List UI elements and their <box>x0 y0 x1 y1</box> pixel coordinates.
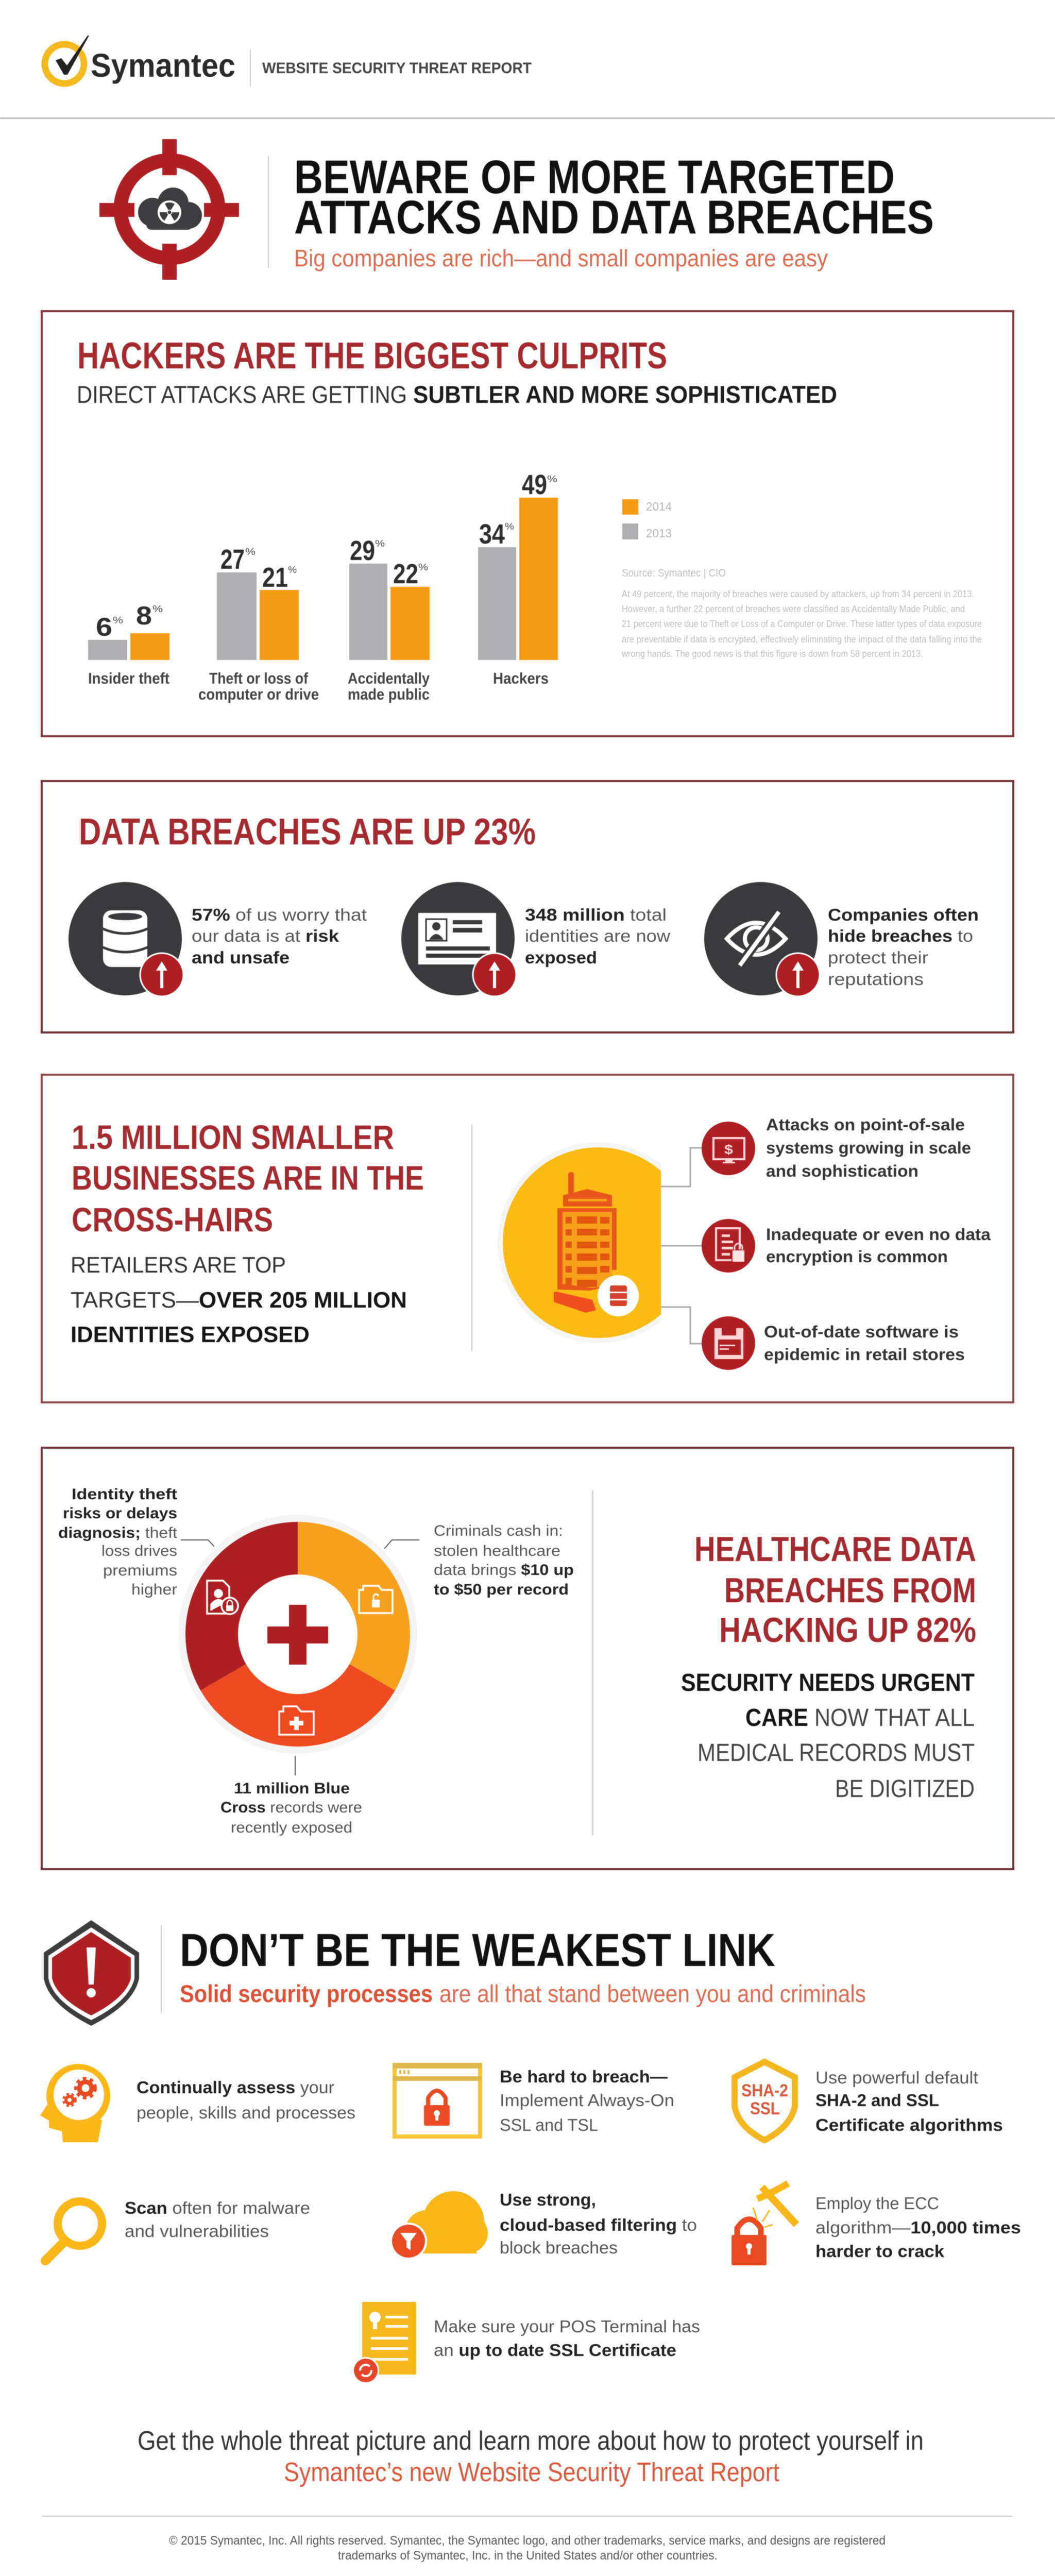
stat text: and unsafe <box>192 948 290 967</box>
stat text: protect their <box>828 948 928 967</box>
tip text: an up to date SSL Certificate <box>434 2341 676 2360</box>
tip text: Certificate algorithms <box>815 2115 1003 2134</box>
bars: accidentally made public: 29 <box>350 535 375 566</box>
donut chart <box>178 1515 417 1754</box>
bars: insider theft <box>88 601 169 687</box>
risk: encryption <box>702 1219 991 1273</box>
callout: Blue Cross records: Cross records were <box>220 1799 362 1816</box>
tip text: and vulnerabilities <box>125 2222 269 2241</box>
logo wordmark: Symantec <box>91 47 235 84</box>
bars: hackers: 49 <box>522 469 547 500</box>
header: Symantec logo and report name <box>45 36 532 87</box>
icon: Symantec check ring <box>45 36 89 83</box>
tip text: Be hard to breach— <box>500 2067 668 2086</box>
subheading: SECURITY NEEDS URGENT <box>681 1669 975 1697</box>
bars: hackers <box>478 469 558 687</box>
subheading: CARE NOW THAT ALL <box>745 1704 975 1732</box>
tip: hard to breach <box>393 2063 674 2137</box>
callout: identity theft: loss drives <box>101 1543 177 1560</box>
callout: criminals cash in: stolen healthcare <box>434 1543 560 1560</box>
tip text: cloud-based filtering to <box>500 2215 697 2234</box>
stat: worry about data <box>69 882 367 996</box>
callout: Blue Cross records: 11 million Blue <box>234 1780 350 1797</box>
legend <box>622 499 672 540</box>
bars: hackers: % <box>505 521 514 532</box>
bars: hackers: 34 <box>479 519 505 550</box>
stat text: 57% of us worry that <box>192 905 367 924</box>
icon: magnifying glass <box>45 2201 102 2261</box>
callout: criminals cash in <box>384 1522 574 1598</box>
icon: crossed-out eye with up arrow <box>704 882 820 996</box>
bars: hackers: Hackers <box>493 669 549 687</box>
bars: insider theft: 8 <box>136 601 152 630</box>
subheading: TARGETS—OVER 205 MILLION <box>71 1287 407 1313</box>
section header: weakest link <box>44 1920 866 2026</box>
stat text: exposed <box>525 948 597 967</box>
title block <box>99 139 934 280</box>
tip text: SHA-2 and SSL <box>815 2091 939 2110</box>
heading <box>72 1118 424 1239</box>
icon: monitor with dollar sign <box>702 1122 755 1175</box>
callout: identity theft <box>58 1486 214 1598</box>
risk text: epidemic in retail stores <box>764 1345 965 1364</box>
main heading <box>294 151 934 244</box>
tip: ECC algorithm <box>731 2183 1021 2265</box>
subheading: are all that stand between you and criminals <box>439 1980 866 2007</box>
bars: insider theft: % <box>113 615 123 625</box>
tip: scan <box>45 2198 310 2261</box>
footer legal text <box>169 2534 886 2563</box>
stat text: 348 million total <box>525 905 667 924</box>
callout: criminals cash in: to $50 per record <box>434 1581 569 1598</box>
stat text: reputations <box>828 970 924 989</box>
legend: 2014 <box>646 500 672 513</box>
icon: medical cross <box>267 1605 328 1665</box>
icon: floppy disk <box>702 1316 755 1370</box>
subheading: SUBTLER AND MORE SOPHISTICATED <box>413 381 837 408</box>
tip: POS terminal certificate <box>352 2302 700 2384</box>
heading: 1.5 MILLION SMALLER <box>72 1118 394 1156</box>
tip text: Use strong, <box>500 2190 596 2209</box>
risk text <box>766 1225 991 1266</box>
subheading: BE DIGITIZED <box>835 1775 975 1803</box>
icon: patient file with lock <box>207 1581 238 1614</box>
explanatory text: At 49 percent, the majority of breaches were caused by attackers, up from 34 percent in 2013. <box>622 589 974 599</box>
icon: padlock and pickaxe <box>731 2183 796 2265</box>
callout: identity theft: diagnosis; theft <box>58 1524 178 1541</box>
tip text: Continually assess your <box>137 2078 334 2097</box>
bar chart <box>88 469 558 703</box>
footer legal text: trademarks of Symantec, Inc. in the United States and/or other countries. <box>338 2549 718 2563</box>
icon: SHA-2 SSL shield: SSL <box>750 2099 780 2119</box>
main heading: BEWARE OF MORE TARGETED <box>294 151 895 204</box>
heading: BREACHES FROM <box>724 1571 976 1610</box>
subheading <box>180 1980 866 2007</box>
icon: cloud with funnel <box>390 2191 488 2260</box>
icon: database badge <box>598 1275 639 1316</box>
subheading <box>77 381 837 408</box>
icon: head with gears <box>40 2064 110 2142</box>
bars: hackers: % <box>547 474 557 484</box>
explanatory text: wrong hands. The good news is that this figure is down from 58 percent in 2013. <box>621 649 923 659</box>
heading: HEALTHCARE DATA <box>694 1530 976 1569</box>
call to action: Get the whole threat picture and learn more about how to protect yourself in <box>138 2426 924 2456</box>
subheading: Solid security processes <box>180 1980 433 2007</box>
subheading: RETAILERS ARE TOP <box>71 1252 286 1278</box>
icon: building <box>554 1172 617 1313</box>
risk text: and sophistication <box>766 1162 918 1180</box>
source note: Source: Symantec | CIO <box>622 567 726 579</box>
footer legal text: © 2015 Symantec, Inc. All rights reserved. Symantec, the Symantec logo, and other trademarks, service marks, and designs are registered <box>169 2534 886 2548</box>
heading: DATA BREACHES ARE UP 23% <box>79 811 536 853</box>
connector lines <box>661 1148 703 1344</box>
panel: healthcare data breaches <box>42 1448 1013 1869</box>
bars: theft or loss: computer or drive <box>198 685 319 703</box>
tip text <box>500 2190 697 2257</box>
subheading: DIRECT ATTACKS ARE GETTING <box>77 381 407 408</box>
risk text: Out-of-date software is <box>764 1323 959 1341</box>
icon: SHA-2 SSL shield: SHA-2 <box>741 2081 788 2100</box>
risk: out-of-date software <box>702 1316 965 1370</box>
tip text: SSL and TSL <box>500 2115 598 2134</box>
bars: theft or loss: % <box>245 547 256 557</box>
risk text <box>766 1115 971 1180</box>
icon: crosshair target with cloud <box>99 139 239 280</box>
stat: identities exposed <box>401 882 670 996</box>
tip text <box>815 2194 1021 2261</box>
tip text: block breaches <box>500 2238 618 2257</box>
call to action <box>138 2426 924 2487</box>
callout: Blue Cross records: recently exposed <box>231 1819 352 1836</box>
stat text: Companies often <box>828 905 979 924</box>
call to action: Symantec’s new Website Security Threat Report <box>284 2458 779 2487</box>
bars: accidentally made public <box>348 535 430 703</box>
stat text <box>192 905 367 967</box>
risk text: systems growing in scale <box>766 1139 971 1157</box>
tip text <box>137 2078 355 2122</box>
subheading: MEDICAL RECORDS MUST <box>697 1739 975 1767</box>
explanatory text: are preventable if data is encrypted, effectively eliminating the impact of the data falling into the <box>622 634 982 645</box>
main heading: ATTACKS AND DATA BREACHES <box>294 191 934 244</box>
stat text: identities are now <box>525 926 670 945</box>
subheading <box>71 1252 407 1347</box>
icon: document with padlock <box>702 1219 755 1273</box>
risk: point of sale <box>702 1115 971 1180</box>
subtitle: Big companies are rich—and small companies are easy <box>294 245 828 272</box>
risk text: encryption is common <box>766 1247 948 1266</box>
bars: insider theft: Insider theft <box>88 669 169 687</box>
heading: HACKING UP 82% <box>719 1611 976 1650</box>
panel: data breaches are up <box>42 781 1013 1032</box>
callout: criminals cash in: data brings $10 up <box>434 1562 574 1579</box>
icon: database with up arrow <box>69 882 183 996</box>
report name: WEBSITE SECURITY THREAT REPORT <box>262 60 532 77</box>
bars: accidentally made public: 22 <box>393 558 418 589</box>
subheading <box>681 1669 975 1803</box>
icon: browser window with lock <box>393 2063 482 2137</box>
heading: BUSINESSES ARE IN THE <box>72 1159 424 1197</box>
tip text <box>125 2198 310 2241</box>
explanatory text: 21 percent were due to Theft or Loss of a Computer or Drive. These latter types of data exposure <box>622 619 982 629</box>
callout: Blue Cross records <box>220 1756 362 1836</box>
callout: criminals cash in: Criminals cash in: <box>434 1522 563 1539</box>
bars: accidentally made public: made public <box>348 685 430 703</box>
risk text: Attacks on point-of-sale <box>766 1115 965 1134</box>
tip: cloud filtering <box>390 2190 697 2260</box>
tip text <box>815 2068 1003 2134</box>
explanatory text: However, a further 22 percent of breaches were classified as Accidentally Made Public, and <box>622 604 965 614</box>
illustration: building on yellow circle <box>498 1143 661 1343</box>
bars: insider theft: 6 <box>96 613 112 641</box>
tip text <box>500 2067 674 2134</box>
callout: identity theft: Identity theft <box>72 1486 177 1503</box>
callout: identity theft: premiums <box>103 1562 177 1579</box>
bars: accidentally made public: % <box>418 562 428 572</box>
icon: monitor with dollar sign: $ <box>724 1142 734 1157</box>
heading <box>694 1530 976 1650</box>
tip text: Make sure your POS Terminal has <box>434 2317 700 2336</box>
tip text: harder to crack <box>815 2242 945 2261</box>
panel: smaller businesses in the cross-hairs <box>42 1075 1013 1402</box>
icon: folder with lock <box>359 1586 393 1613</box>
heading: DON’T BE THE WEAKEST LINK <box>180 1925 775 1976</box>
icon: certificate with renew badge <box>352 2302 416 2384</box>
tip: continually assess <box>40 2064 355 2142</box>
heading: CROSS-HAIRS <box>72 1200 273 1239</box>
stat text <box>525 905 670 967</box>
icon: SHA-2 SSL shield <box>735 2062 795 2140</box>
risk text <box>764 1323 965 1364</box>
tip text: Scan often for malware <box>125 2198 310 2217</box>
tip text: algorithm— 10,000 times <box>815 2218 1021 2237</box>
tip text: people, skills and processes <box>137 2103 355 2122</box>
stat: companies hide breaches <box>704 882 979 996</box>
bars: theft or loss: 21 <box>262 562 288 593</box>
subheading: IDENTITIES EXPOSED <box>71 1322 310 1347</box>
icon: medical folder <box>279 1706 314 1735</box>
bars: insider theft: % <box>152 604 163 614</box>
bars: theft or loss: Theft or loss of <box>209 669 309 687</box>
icon: warning shield <box>44 1920 139 2026</box>
tip text: Employ the ECC <box>815 2194 939 2213</box>
tip text: Implement Always-On <box>500 2091 674 2110</box>
legend: 2013 <box>646 527 672 540</box>
icon: identity card with up arrow <box>401 882 516 996</box>
bars: theft or loss <box>198 544 319 703</box>
panel: hackers are the biggest culprits <box>42 311 1013 736</box>
stat text: hide breaches to <box>828 926 973 945</box>
risk text: Inadequate or even no data <box>766 1225 991 1244</box>
bars: theft or loss: % <box>288 565 297 575</box>
bars: theft or loss: 27 <box>220 544 245 575</box>
tip: SHA-2 and SSL <box>735 2062 1003 2140</box>
stat text <box>828 905 979 989</box>
stat text: our data is at risk <box>192 926 339 945</box>
callout: identity theft: risks or delays <box>63 1505 177 1522</box>
tip text <box>434 2317 700 2360</box>
bars: accidentally made public: % <box>375 538 385 549</box>
tip text: Use powerful default <box>815 2068 978 2087</box>
explanatory text <box>621 589 982 659</box>
bars: accidentally made public: Accidentally <box>348 669 430 687</box>
heading: HACKERS ARE THE BIGGEST CULPRITS <box>77 335 667 377</box>
callout: identity theft: higher <box>131 1581 177 1598</box>
